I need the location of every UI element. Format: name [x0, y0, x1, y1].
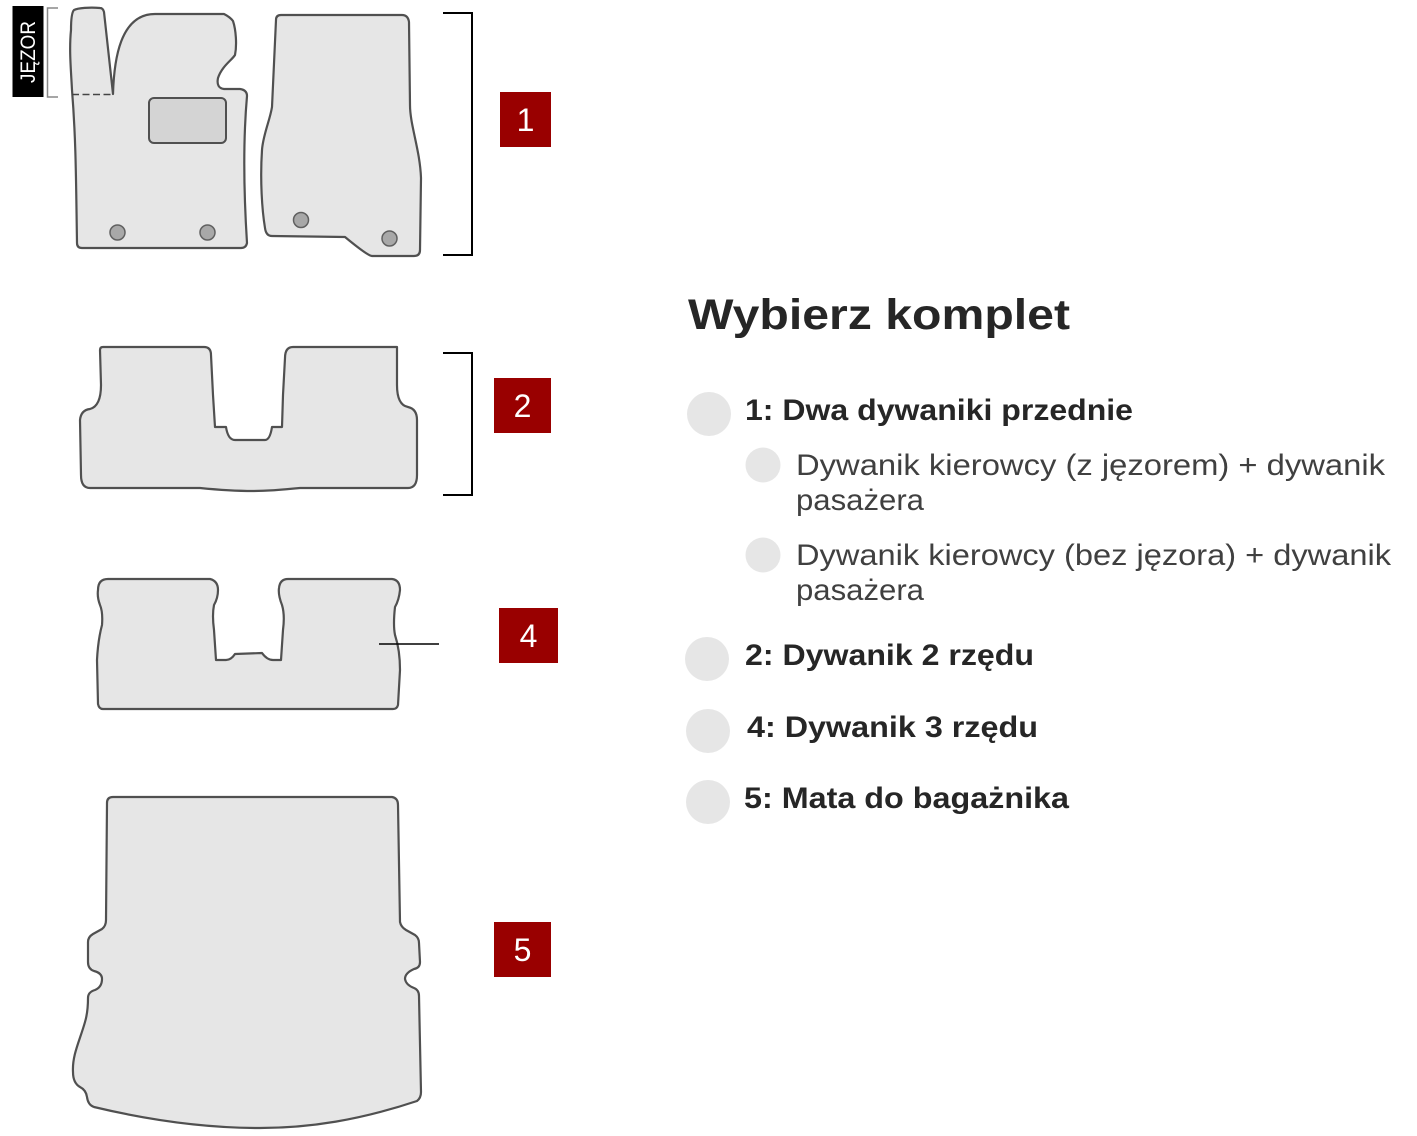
option 5: 5: Mata do bagażnika	[744, 782, 1069, 815]
bracket 2	[443, 353, 472, 495]
driver mat	[70, 8, 247, 248]
tongue label: JĘZOR	[17, 21, 40, 83]
sub-option with tongue: Dywanik kierowcy (z jęzorem) + dywanik	[796, 449, 1386, 482]
badge 4	[499, 608, 558, 663]
panel: front mats set 1	[12, 6, 551, 256]
badge 4: 4	[520, 618, 537, 654]
heading: Wybierz komplet	[688, 291, 1070, 339]
badge 5: 5	[514, 932, 531, 968]
option 2	[685, 637, 1034, 681]
sub-option with tongue	[746, 448, 1386, 517]
badge 2: 2	[514, 388, 531, 424]
panel: third row mat	[97, 579, 558, 709]
option 4: 4: Dywanik 3 rzędu	[747, 711, 1038, 744]
option 1	[687, 392, 1133, 436]
panel: trunk mat	[73, 797, 551, 1128]
sub-option without tongue: Dywanik kierowcy (bez jęzora) + dywanik	[796, 539, 1392, 572]
badge 1	[500, 92, 551, 147]
leader line 4	[379, 643, 439, 645]
badge 1: 1	[517, 102, 534, 138]
tongue label	[12, 6, 58, 97]
option 5	[686, 780, 1069, 824]
option 1: 1: Dwa dywaniki przednie	[745, 394, 1133, 427]
mat 5	[73, 797, 421, 1128]
panel: second row mat	[80, 347, 551, 495]
passenger mat	[261, 15, 421, 256]
sub-option without tongue	[746, 538, 1392, 607]
sub-option without tongue: pasażera	[796, 574, 924, 607]
mat 2	[80, 347, 417, 491]
panel: set selection list	[685, 291, 1392, 824]
sub-option with tongue: pasażera	[796, 484, 924, 517]
option 2: 2: Dywanik 2 rzędu	[745, 639, 1034, 672]
badge 2	[494, 378, 551, 433]
badge 5	[494, 922, 551, 977]
mat 4	[97, 579, 400, 709]
option 4	[686, 709, 1038, 753]
bracket 1	[443, 13, 472, 255]
